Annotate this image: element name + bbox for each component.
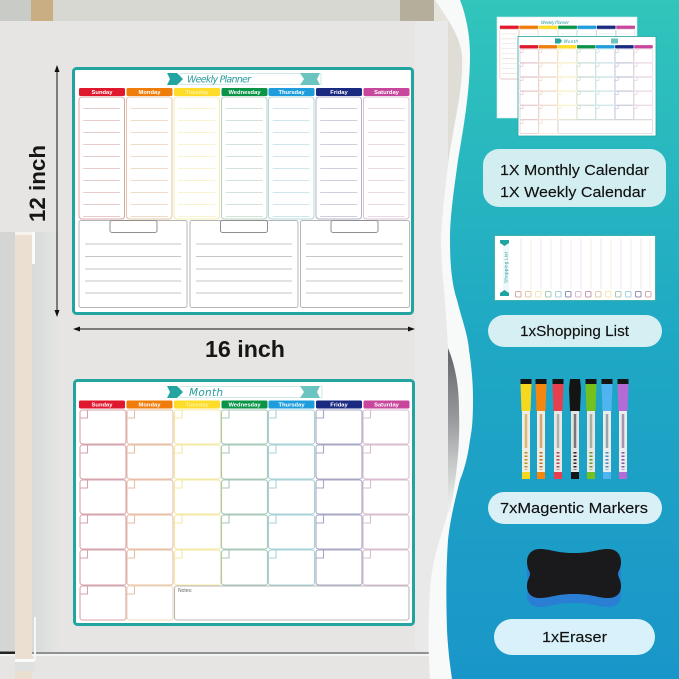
pill label: markers: 7xMagentic Markers [500,500,648,517]
white wavy band [428,0,475,679]
thumbnail: weekly planner card [497,17,637,118]
pill label: shopping list [488,315,662,347]
width arrow [73,326,415,332]
thumbnail: monthly calendar card: Month [564,39,578,44]
notes boxes [79,220,410,308]
weekday headers [92,90,400,96]
width label: 16 inch: 16 inch [205,336,285,362]
height label: 12 inch: 12 inch [25,145,50,222]
weekday headers: Tuesday [185,90,209,96]
fridge door handle [0,232,60,679]
month grid [79,400,410,620]
pill label: markers [488,492,662,524]
title: weekly planner [167,73,321,86]
thumbnail: monthly calendar card [518,36,656,136]
thumbnail: weekly planner card: Weekly Planner [541,20,569,25]
month weekday headers: Saturday [374,402,400,408]
weekday headers: Saturday [374,90,400,96]
thumbnail: shopping list [494,236,656,300]
title: month: Month [189,387,223,399]
weekday headers: Monday [139,90,161,96]
weekday headers: Sunday [92,90,113,96]
title: weekly planner: Weekly Planner [187,74,252,86]
month weekday headers: Wednesday [228,402,261,408]
thumbnail: shopping list: Shopping List [504,251,508,283]
panel: teal gradient sidebar [446,0,679,679]
pill label: eraser [494,619,655,655]
notes label: Notes: [178,588,192,594]
icon: seven magnetic markers [520,379,628,479]
weekday headers: Thursday [278,90,305,96]
pill label: calendars: 1X Monthly Calendar [500,162,649,179]
pill label: eraser: 1xEraser [542,629,607,646]
height arrow [54,65,60,317]
month weekday headers: Friday [330,402,348,408]
month weekday headers: Sunday [92,402,113,408]
panel: monthly calendar board [74,380,414,624]
pill label: calendars: 1X Weekly Calendar [500,184,646,201]
pill label: calendars [483,149,666,207]
month weekday headers: Monday [139,402,161,408]
pill label: shopping list: 1xShopping List [520,323,630,340]
title: month [167,386,322,399]
dark gap beside the fridge door [448,348,459,512]
weekday headers: Friday [330,90,348,96]
weekly day columns [79,88,410,219]
month weekday headers: Tuesday [185,402,209,408]
month weekday headers: Thursday [278,402,305,408]
icon: eraser [527,549,621,607]
month weekday headers [92,402,400,408]
panel: weekly planner board [74,68,412,314]
weekday headers: Wednesday [228,90,261,96]
